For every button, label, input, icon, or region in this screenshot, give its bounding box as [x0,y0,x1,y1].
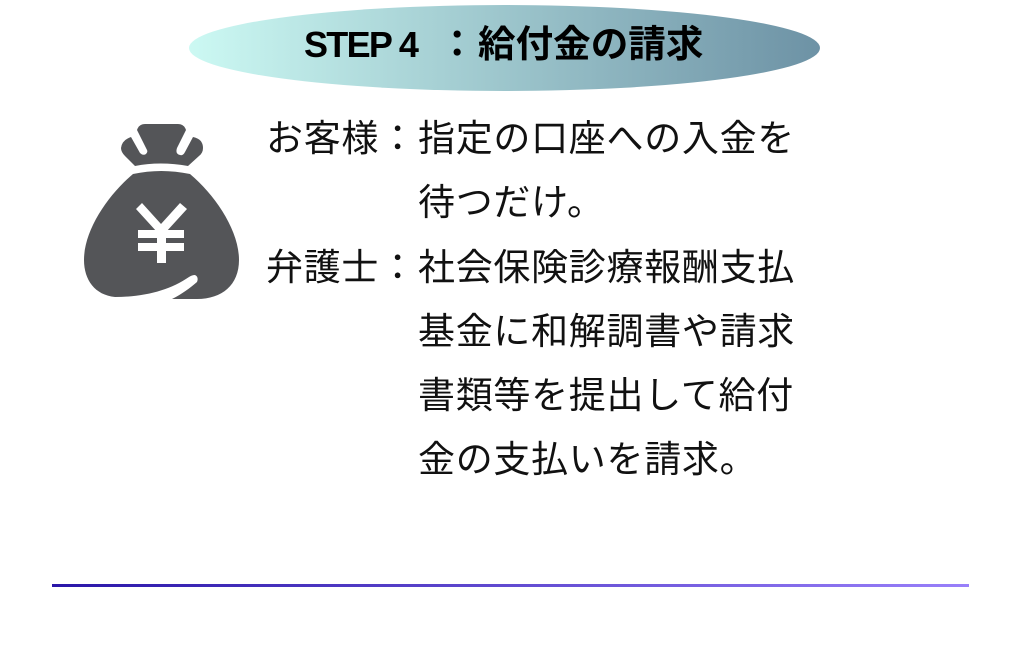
text block: lawyer: 弁護士： [266,247,417,288]
text block: customer: お客様： [266,118,417,159]
text block: customer [266,118,795,223]
text block: customer: 待つだけ。 [418,182,605,223]
text block: lawyer: 社会保険診療報酬支払 [418,247,795,288]
icon: money bag with yen sign [84,124,239,299]
text block: lawyer: 書類等を提出して給付 [418,375,794,416]
title banner [189,5,820,91]
text block: customer: 指定の口座への入金を [418,118,795,159]
title banner: ： [438,23,476,65]
bottom gradient rule [52,584,969,587]
text block: lawyer: 金の支払いを請求。 [418,439,757,480]
title banner: STEP 4 [304,24,417,65]
text block: lawyer [266,247,795,480]
title banner: 給付金の請求 [478,23,703,65]
text block: lawyer: 基金に和解調書や請求 [418,311,795,352]
